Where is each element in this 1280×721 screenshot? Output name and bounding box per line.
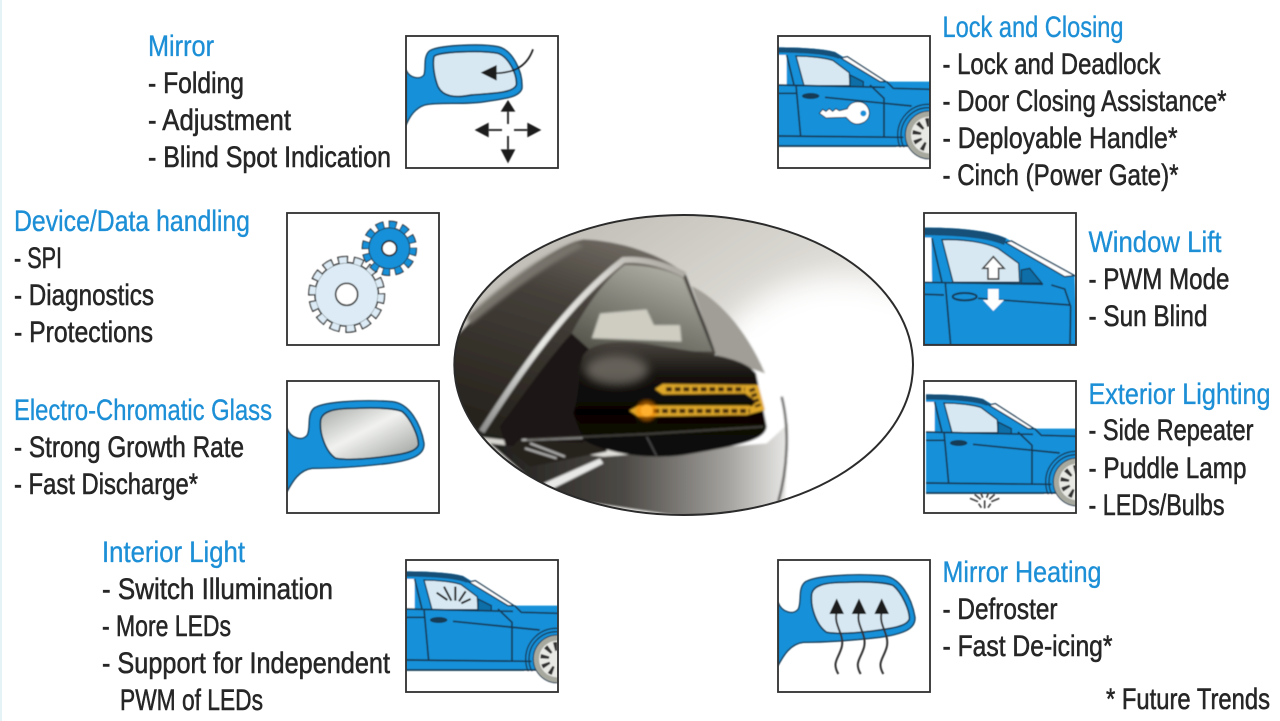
panel: Mirror Heating [778, 556, 1113, 692]
car roof [450, 239, 717, 450]
side windows [572, 265, 713, 352]
list: Device/Data features: - Diagnostics [14, 279, 154, 312]
list: Window Lift features: - PWM Mode [1088, 263, 1230, 296]
panel: Mirror [148, 30, 558, 174]
list: Device/Data features [14, 242, 154, 349]
panel: Interior Light [102, 540, 559, 710]
heading: Mirror Heating: Mirror Heating [942, 556, 1102, 589]
list: Interior Light features: - Support for Independent [102, 647, 390, 680]
panel: Device/Data handling [14, 205, 439, 349]
list: Interior Light features: PWM of LEDs [120, 684, 263, 717]
list: Mirror Heating features: - Defroster [942, 593, 1058, 626]
icon: heated mirror [778, 560, 930, 692]
list: Lock and Closing features: - Lock and Deadlock [942, 48, 1161, 81]
icon: car with puddle lamp [923, 380, 1077, 514]
list: Interior Light features [102, 573, 390, 717]
mirror housing [573, 342, 767, 457]
list: Lock and Closing features: - Deployable Handle* [942, 122, 1178, 155]
icon: mirror adjustment [406, 36, 558, 168]
list: Window Lift features: - Sun Blind [1088, 300, 1208, 333]
icon: door with window arrows [924, 213, 1077, 348]
list: Interior Light features: - More LEDs [102, 610, 231, 643]
icon: car door with key [777, 35, 931, 169]
heading: Window Lift: Window Lift [1088, 226, 1222, 259]
list: Electro-Chromatic features [14, 431, 244, 501]
photo: car mirror with LED indicator [453, 214, 914, 516]
icon: gears [287, 213, 439, 345]
list: Electro-Chromatic features: - Fast Discharge* [14, 468, 198, 501]
heading: Electro-Chromatic Glass: Electro-Chromatic Glass [14, 394, 272, 427]
list: Mirror features: - Blind Spot Indication [148, 141, 391, 174]
list: Window Lift features [1088, 263, 1230, 333]
list: Exterior Lighting features: - Puddle Lamp [1088, 452, 1246, 485]
list: Mirror features: - Folding [148, 67, 244, 100]
list: Lock and Closing features [942, 48, 1227, 192]
panel: Electro-Chromatic Glass [14, 381, 439, 513]
list: Mirror Heating features [942, 593, 1113, 663]
list: Device/Data features: - Protections [14, 316, 153, 349]
list: Exterior Lighting features: - LEDs/Bulbs [1088, 489, 1224, 522]
list: Mirror Heating features: - Fast De-icing* [942, 630, 1113, 663]
heading: Interior Light: Interior Light [102, 536, 245, 569]
list: Interior Light features: - Switch Illumination [102, 573, 333, 606]
panel: Exterior Lighting [924, 378, 1270, 522]
heading: Device/Data handling: Device/Data handling [14, 205, 250, 238]
list: Lock and Closing features: - Cinch (Power Gate)* [942, 159, 1179, 192]
LED indicator [655, 384, 765, 412]
chrome strip [482, 260, 685, 432]
lower door [500, 333, 590, 450]
heading: Mirror: Mirror [148, 30, 214, 63]
list: Device/Data features: - SPI [14, 242, 62, 275]
icon: car with interior light [405, 559, 559, 693]
heading: Lock and Closing: Lock and Closing [942, 11, 1124, 44]
panel: Window Lift [924, 213, 1230, 348]
list: Electro-Chromatic features: - Strong Growth Rate [14, 431, 244, 464]
icon: electro-chromatic mirror [287, 381, 439, 513]
list: Mirror features [148, 67, 391, 174]
left edge tint [0, 0, 2, 721]
list: Mirror features: - Adjustment [148, 104, 291, 137]
list: Exterior Lighting features [1088, 414, 1254, 522]
panel: Lock and Closing [778, 11, 1227, 192]
